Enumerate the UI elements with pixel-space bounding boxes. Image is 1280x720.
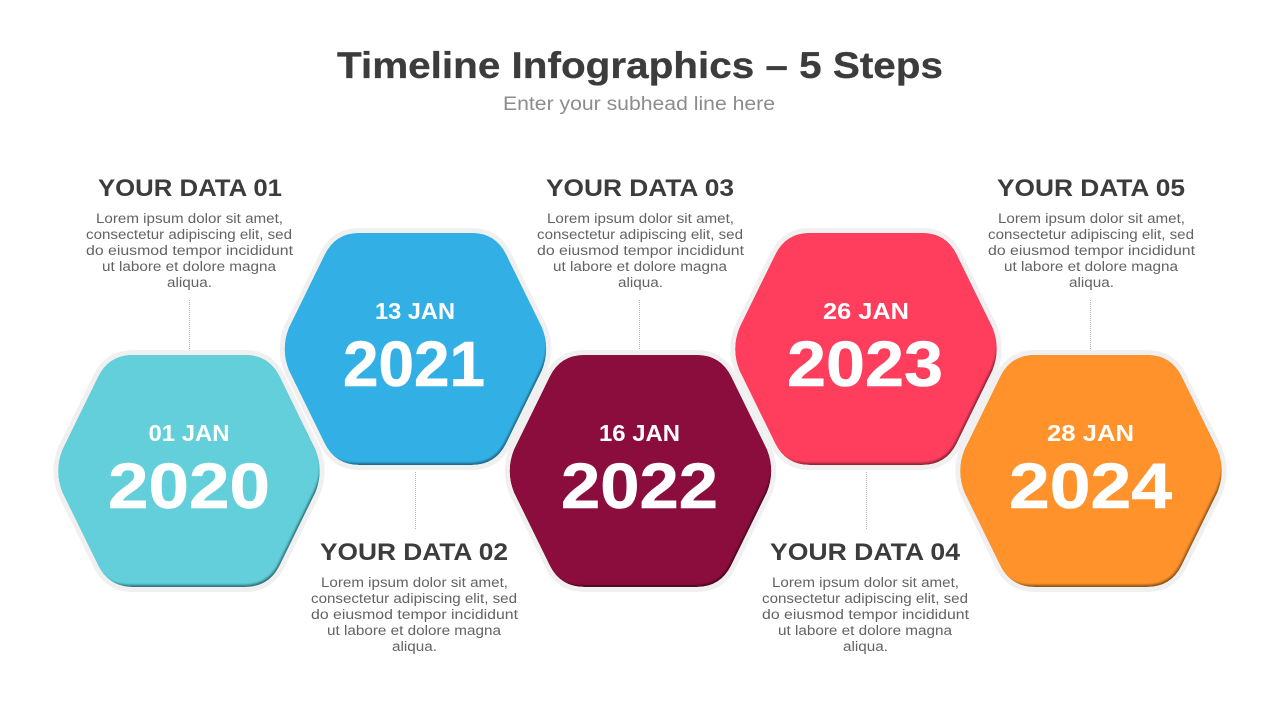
text block: data 01: YOUR DATA 01: [98, 175, 282, 202]
text block: data 04: consectetur adipiscing elit, sed: [762, 591, 968, 606]
text block: data 05: ut labore et dolore magna: [1004, 259, 1179, 274]
text block: data 05: YOUR DATA 05: [997, 175, 1185, 202]
text block: data 04: [762, 472, 969, 654]
text block: data 01: [86, 175, 293, 349]
step 1: hexagon 2020: 01 JAN: [148, 420, 230, 446]
text block: data 04: Lorem ipsum dolor sit amet,: [772, 575, 959, 590]
step 4: hexagon 2023: [731, 227, 997, 465]
text block: data 02: Lorem ipsum dolor sit amet,: [321, 575, 508, 590]
step 2: hexagon 2021: [281, 227, 547, 465]
text block: data 03: Lorem ipsum dolor sit amet,: [547, 211, 734, 226]
step 5: hexagon 2024: 28 JAN: [1047, 420, 1134, 446]
text block: data 01: consectetur adipiscing elit, sed: [86, 227, 292, 242]
step 3: hexagon 2022: [506, 349, 772, 587]
step 5: hexagon 2024: 2024: [1009, 450, 1172, 522]
step 1: hexagon 2020: 2020: [108, 450, 270, 522]
title: Timeline Infographics – 5 Steps: [337, 45, 943, 86]
text block: data 02: aliqua.: [392, 639, 437, 654]
step 2: hexagon 2021: 2021: [343, 328, 485, 400]
step 2: hexagon 2021: 13 JAN: [375, 298, 455, 324]
text block: data 05: [988, 175, 1195, 349]
text block: data 02: YOUR DATA 02: [320, 539, 508, 566]
text block: data 04: ut labore et dolore magna: [778, 623, 953, 638]
step 3: hexagon 2022: 2022: [561, 450, 718, 522]
text block: data 05: Lorem ipsum dolor sit amet,: [998, 211, 1185, 226]
text block: data 01: do eiusmod tempor incididunt: [86, 243, 293, 258]
step 1: hexagon 2020: [54, 349, 320, 587]
text block: data 03: YOUR DATA 03: [546, 175, 734, 202]
text block: data 04: aliqua.: [843, 639, 888, 654]
step 5: hexagon 2024: [956, 349, 1222, 587]
step 3: hexagon 2022: 16 JAN: [599, 420, 680, 446]
subtitle: Enter your subhead line here: [503, 94, 775, 115]
text block: data 02: consectetur adipiscing elit, sed: [311, 591, 517, 606]
text block: data 03: consectetur adipiscing elit, sed: [537, 227, 743, 242]
text block: data 05: aliqua.: [1069, 275, 1114, 290]
text block: data 05: do eiusmod tempor incididunt: [988, 243, 1195, 258]
text block: data 03: ut labore et dolore magna: [553, 259, 728, 274]
step 4: hexagon 2023: 2023: [787, 328, 943, 400]
text block: data 04: do eiusmod tempor incididunt: [762, 607, 969, 622]
text block: data 03: [537, 175, 744, 349]
text block: data 02: [311, 472, 518, 654]
text block: data 03: aliqua.: [618, 275, 663, 290]
text block: data 04: YOUR DATA 04: [770, 539, 961, 566]
text block: data 02: ut labore et dolore magna: [327, 623, 502, 638]
text block: data 05: consectetur adipiscing elit, sed: [988, 227, 1194, 242]
text block: data 01: aliqua.: [167, 275, 212, 290]
step 4: hexagon 2023: 26 JAN: [823, 298, 909, 324]
text block: data 02: do eiusmod tempor incididunt: [311, 607, 518, 622]
text block: data 01: Lorem ipsum dolor sit amet,: [96, 211, 283, 226]
text block: data 01: ut labore et dolore magna: [102, 259, 277, 274]
text block: data 03: do eiusmod tempor incididunt: [537, 243, 744, 258]
